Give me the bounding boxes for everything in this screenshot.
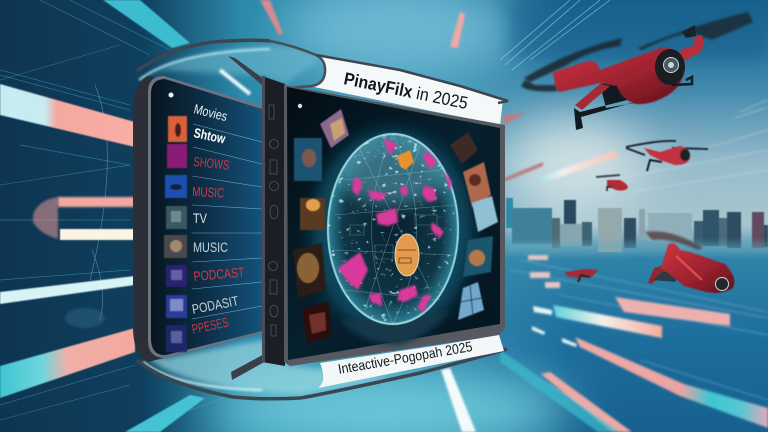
banner: title xyxy=(270,41,508,125)
row dividers xyxy=(192,124,262,319)
light streaks: right xyxy=(260,0,768,432)
frame arcs xyxy=(137,40,507,399)
subtitle text: Inteactive-Pogopah 2025 xyxy=(337,338,474,377)
list labels xyxy=(191,101,245,337)
drone: large, lower right xyxy=(645,231,734,293)
panel screen xyxy=(151,79,262,355)
orange pendant xyxy=(395,234,419,276)
list labels: Shtow xyxy=(192,125,227,147)
list labels: TV xyxy=(193,211,207,226)
list labels: MUSIC xyxy=(192,184,225,201)
arm: right xyxy=(680,35,703,62)
screen xyxy=(287,87,500,360)
list labels: Movies xyxy=(192,101,229,124)
list labels: PPESES xyxy=(191,315,230,337)
banner: subtitle xyxy=(318,335,504,388)
drone: small, upper xyxy=(626,141,708,171)
panel: category list xyxy=(133,76,262,362)
list labels: MUSIC xyxy=(193,240,228,255)
magenta land masses xyxy=(338,138,452,312)
panel: globe screen xyxy=(284,85,505,366)
list labels: PODASIT xyxy=(191,293,240,317)
title text: PinayFilx in 2025 xyxy=(342,68,470,113)
globe xyxy=(327,133,459,325)
globe network lines xyxy=(332,134,455,324)
support bars xyxy=(228,56,268,380)
body xyxy=(553,48,684,104)
panel casing xyxy=(133,76,262,362)
landing gear and gimbal xyxy=(574,78,635,130)
rotor: left xyxy=(521,38,622,91)
drone: small, far xyxy=(596,175,628,191)
globe halo xyxy=(312,130,472,334)
list thumbnails xyxy=(164,116,187,352)
list labels: PODCAST xyxy=(193,265,245,284)
device spine xyxy=(262,76,285,366)
floating media thumbnails xyxy=(293,109,498,344)
city skyline xyxy=(506,198,768,252)
rotor: right xyxy=(638,12,753,50)
screen bezel xyxy=(284,85,505,366)
lens xyxy=(655,49,685,85)
drone: small, low xyxy=(565,269,598,282)
orange marker: top xyxy=(397,150,414,170)
list labels: SHOWS xyxy=(193,154,230,173)
light streaks: left xyxy=(0,0,205,432)
drone: large, top right xyxy=(521,12,753,130)
